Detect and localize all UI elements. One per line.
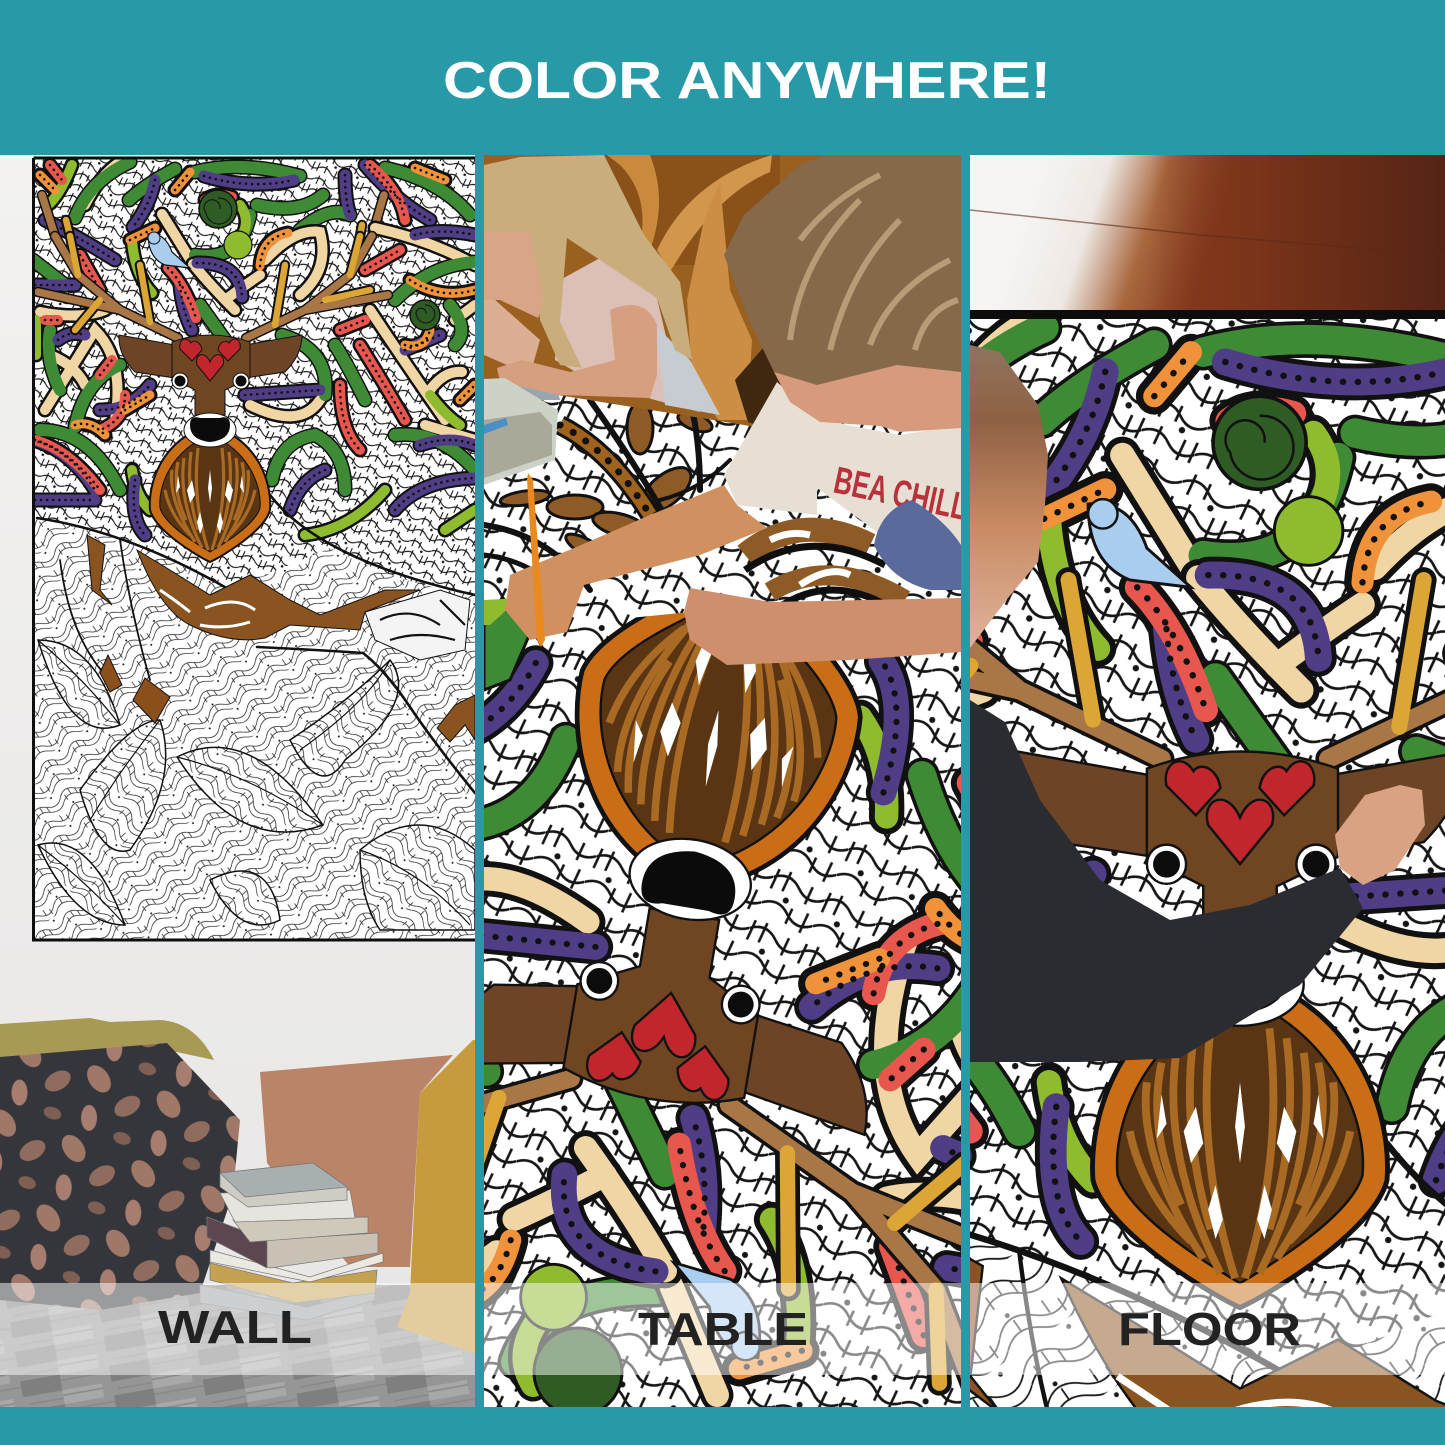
book stack [200,1163,383,1320]
man's black sweater [970,700,1363,1062]
poster on floor [970,319,1445,1407]
header band [0,0,1445,155]
wall background [0,155,475,1407]
wooden chairs background [484,155,825,426]
panel: floor [970,155,1445,1407]
basket [0,1043,240,1310]
boy's shirt [724,382,971,590]
girl with blond hair [484,155,720,415]
footer band [0,1407,1445,1445]
poster body patch on table [484,400,910,692]
lower poster bands near the table edge [515,1271,717,1395]
lower poster swirl [534,1328,622,1416]
boy's face [774,360,961,432]
label: wall: WALL [158,1301,312,1353]
label: floor: FLOOR [1118,1303,1301,1355]
label band: floor [970,1283,1445,1375]
floor [0,1285,475,1407]
panel: table [484,155,961,1407]
hair highlights [790,175,958,350]
pillow [260,1055,453,1267]
pencil [527,473,545,647]
yellow chair [397,1040,475,1353]
boy's hair [724,155,961,385]
basket blanket [0,1018,214,1062]
boy's left arm and hand [684,588,961,665]
title: COLOR ANYWHERE! [443,52,1051,110]
coloring poster on wall [33,158,475,940]
shirt lettering: BEA CHILL [830,460,971,529]
rotated poster artwork [484,612,961,1396]
label band: wall [0,1283,475,1375]
panel: wall [0,155,475,1407]
man's hand [1335,785,1425,885]
shirt whale [874,500,961,590]
boy's right arm and hand [505,485,767,640]
label: table: TABLE [638,1303,808,1355]
plastic crayon box [484,378,558,485]
poster on table [484,395,961,1407]
label band: table [484,1283,961,1375]
man's head [970,345,1048,648]
poster edge [970,310,1445,319]
poster frame [34,158,475,940]
wood floor [970,155,1445,315]
